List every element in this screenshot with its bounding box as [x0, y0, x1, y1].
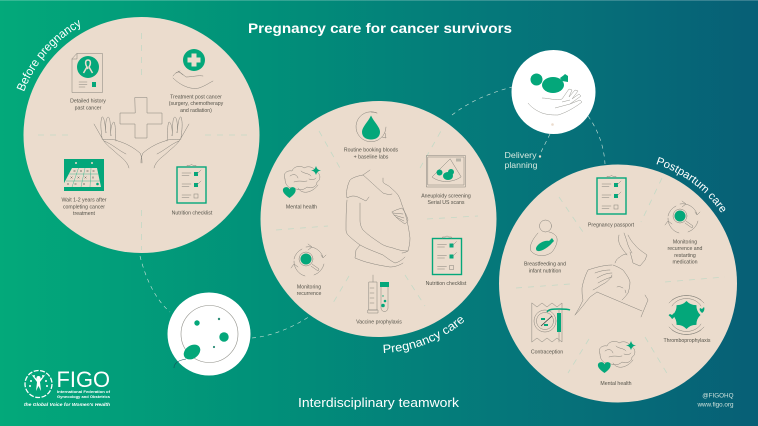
text: contraception: Contraception — [531, 350, 563, 356]
text: wait: completing cancer — [63, 204, 105, 210]
icon: contraception — [532, 303, 570, 342]
text: nutrition checklist: Nutrition checklist — [172, 210, 213, 216]
text: routine bloods: Routine booking bloods — [344, 148, 399, 154]
panel: postpartum care — [499, 164, 737, 402]
postpartum figure — [575, 233, 648, 317]
text: nutrition checklist: Nutrition checklist — [426, 281, 467, 287]
icon: mental health — [283, 166, 321, 198]
text: mental health: Mental health — [600, 381, 632, 387]
icon: nutrition checklist — [432, 236, 462, 274]
text: monitoring recurrence: recurrence and — [668, 246, 703, 252]
icon: monitoring recurrence — [291, 244, 326, 276]
icon: treatment plus and hand — [173, 49, 213, 88]
icon: calendar — [62, 159, 104, 191]
logo: FIGO: the Global Voice for Women's Health — [24, 402, 110, 407]
icon: delivery white circle — [512, 50, 596, 134]
text: delivery planning: planning — [504, 160, 538, 170]
label: postpartum care: Postpartum care — [656, 157, 726, 212]
icon: blood drop — [356, 112, 386, 142]
text: monitoring: Monitoring — [297, 284, 321, 290]
icon: ultrasound — [426, 156, 466, 187]
text: delivery planning: Delivery — [504, 150, 537, 160]
text: routine bloods: + baseline labs — [354, 154, 389, 160]
text: aneuploidy: Serial US scans — [428, 200, 465, 206]
text: wait: Wait 1-2 years after — [61, 198, 107, 204]
woman figure — [346, 170, 410, 267]
panel: before pregnancy — [24, 17, 260, 253]
text: aneuploidy: Aneuploidy screening — [421, 194, 471, 200]
text: wait: treatment — [73, 211, 96, 217]
icon: nutrition checklist — [177, 164, 206, 203]
text: treatment: and radiation) — [180, 108, 212, 114]
text: interdisciplinary teamwork: Interdisciplinary teamwork — [298, 395, 460, 410]
text: delivery planning — [504, 150, 541, 170]
text: monitoring: recurrence — [297, 291, 322, 297]
icon: thrombosis vessel — [669, 296, 704, 334]
text: treatment: Treatment post cancer — [170, 94, 222, 100]
connecting dashed path — [140, 87, 605, 338]
logo: FIGO: Gynecology and Obstetrics — [57, 395, 110, 399]
text: social handles: @FIGOHQ — [702, 392, 734, 400]
logo: FIGO: International Federation of — [57, 390, 111, 394]
text: vaccine: Vaccine prophylaxis — [356, 320, 402, 326]
text: treatment: (surgery, chemotherapy — [169, 101, 224, 107]
panel: pregnancy care — [260, 101, 496, 337]
icon: embryo white circle — [168, 292, 250, 376]
icon: syringe and test tube — [368, 275, 389, 313]
text: breastfeeding: Breastfeeding and — [524, 262, 566, 268]
logo: FIGO: FIGO — [56, 367, 110, 392]
center icon: cross and hands — [94, 98, 189, 168]
text: social handles: www.figo.org — [696, 402, 734, 408]
icon: history document — [72, 54, 102, 92]
text: social handles — [696, 392, 734, 408]
text: thrombo: Thromboprophylaxis — [664, 338, 711, 344]
logo: FIGO — [24, 367, 111, 407]
text: pregnancy passport: Pregnancy passport — [588, 222, 635, 228]
label: pregnancy care: Pregnancy care — [384, 317, 464, 353]
icon: breastfeeding — [530, 220, 557, 256]
text: breastfeeding: infant nutrition — [529, 268, 561, 274]
icon: mental health — [598, 341, 636, 373]
title: Pregnancy care for cancer survivors — [248, 21, 512, 36]
text: monitoring recurrence: restarting — [674, 253, 696, 259]
label: before pregnancy: Before pregnancy — [16, 20, 80, 92]
text: detailed history: Detailed history — [70, 98, 106, 104]
text: mental health: Mental health — [286, 204, 317, 210]
text: monitoring recurrence: medication — [672, 260, 698, 266]
icon: monitoring recurrence — [665, 201, 700, 233]
icon: pregnancy passport — [597, 176, 626, 214]
text: detailed history: past cancer — [75, 106, 102, 112]
text: monitoring recurrence: Monitoring — [673, 240, 697, 246]
